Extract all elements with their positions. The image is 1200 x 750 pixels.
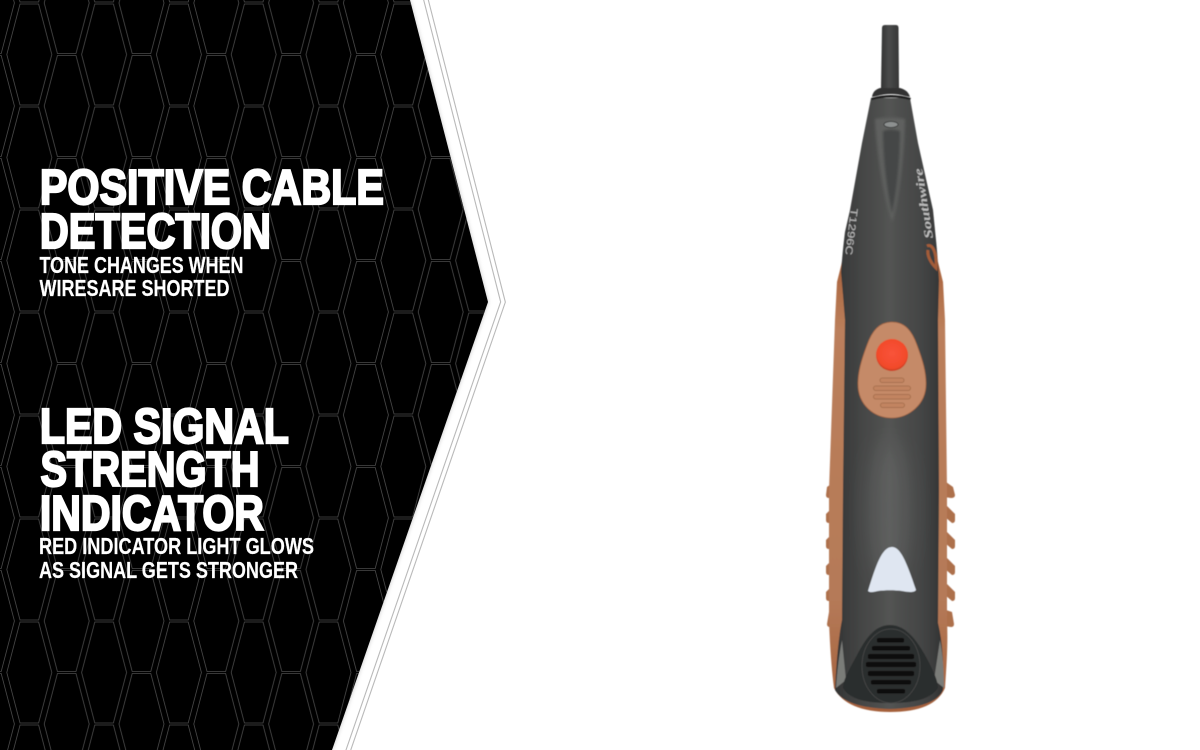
dark body: [835, 98, 943, 709]
product: cable tone probe: [826, 25, 955, 712]
speaker wedge: [843, 625, 938, 703]
panel: black arrow with hexagon pattern: [0, 0, 503, 750]
speaker grille: [862, 629, 920, 703]
button ribs: [874, 378, 910, 408]
heading: positive cable detection: [40, 161, 384, 259]
collar: [872, 88, 910, 97]
heading: led signal strength indicator: STRENGTH: [40, 443, 260, 497]
text: tone changes: [40, 252, 244, 301]
lower side strips: [836, 640, 846, 688]
heading: led signal strength indicator: [40, 400, 289, 541]
side bumps: [826, 482, 955, 627]
text: tone changes: TONE CHANGES WHEN: [40, 252, 244, 278]
heading: led signal strength indicator: INDICATOR: [40, 487, 264, 541]
brand text: Southwire: [911, 166, 936, 240]
red button: [876, 339, 908, 371]
text: tone changes: WIRESARE SHORTED: [40, 275, 230, 301]
led lens: [868, 547, 916, 592]
text: red indicator light: RED INDICATOR LIGHT GLOWS: [39, 533, 314, 559]
model text: T1296C: [842, 208, 859, 256]
heading: positive cable detection: POSITIVE CABLE: [40, 161, 384, 215]
button surround: [858, 322, 926, 418]
rubber grip: [829, 262, 947, 712]
center sheen: [867, 440, 911, 580]
probe tip: [881, 25, 899, 88]
text: red indicator light: AS SIGNAL GETS STRONGER: [39, 557, 298, 583]
brand logo: [927, 246, 936, 268]
heading: positive cable detection: DETECTION: [40, 205, 271, 259]
indicator window: [884, 122, 898, 128]
text: red indicator light: [39, 533, 314, 583]
heading: led signal strength indicator: LED SIGNAL: [40, 400, 289, 454]
nose groove: [875, 118, 905, 222]
